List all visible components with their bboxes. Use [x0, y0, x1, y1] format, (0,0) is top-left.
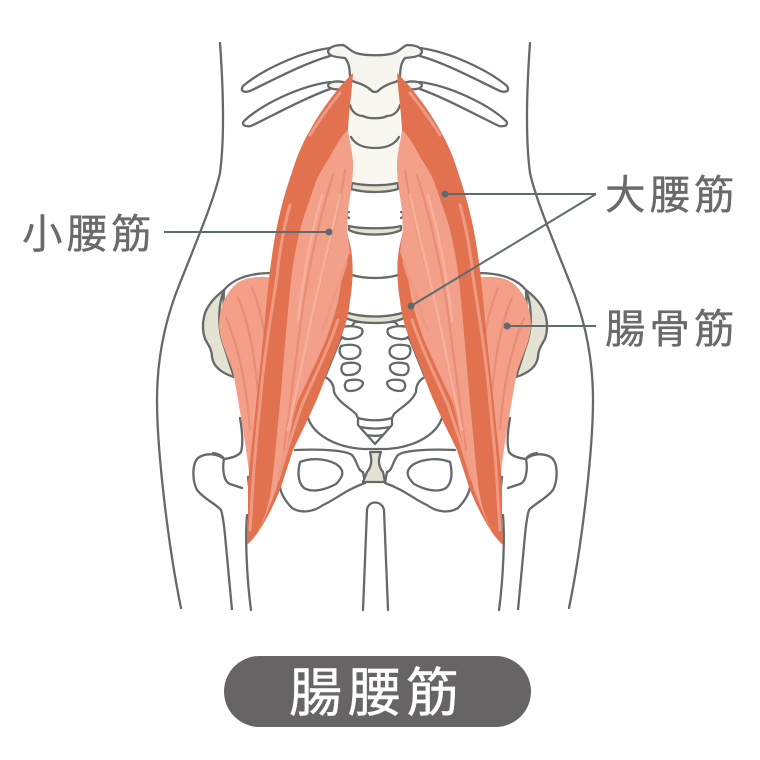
leader: 小腰筋: [164, 228, 332, 236]
vertebra 2 lower edge: [350, 105, 400, 118]
muscles, left: [219, 73, 353, 545]
sacrum: [325, 322, 425, 444]
body and pelvis outline, right half: [385, 43, 593, 610]
vertebral body fill: [350, 60, 400, 187]
title: 腸腰筋: [289, 664, 464, 723]
vertebra 4 band: [351, 183, 398, 192]
coccyx segments: [358, 418, 392, 436]
muscles, right: [397, 73, 531, 545]
body and pelvis outline, left half: [157, 43, 365, 610]
title pill: [224, 656, 531, 727]
vertebra 1: [328, 45, 422, 92]
vertebra 3 lower edge: [351, 137, 399, 148]
facet marks: [347, 212, 403, 218]
pubic symphysis: [363, 452, 385, 482]
leader: 大腰筋 lower: [408, 194, 596, 310]
sacral foramina, right: [387, 326, 411, 391]
pelvic ring: [308, 418, 442, 449]
label: 小腰筋: 小腰筋: [22, 211, 156, 257]
label: 腸骨筋: 腸骨筋: [605, 306, 738, 352]
leader: 大腰筋 upper: [442, 190, 596, 198]
leader: 腸骨筋: [504, 322, 596, 330]
vertebra 5 band: [349, 226, 401, 234]
sacral foramina, left: [339, 326, 363, 391]
label: 大腰筋: 大腰筋: [605, 172, 738, 218]
vertebra 6 edge: [352, 275, 398, 278]
sacral top band: [344, 312, 406, 323]
central leg gap: [363, 502, 388, 610]
spine: [328, 45, 422, 278]
